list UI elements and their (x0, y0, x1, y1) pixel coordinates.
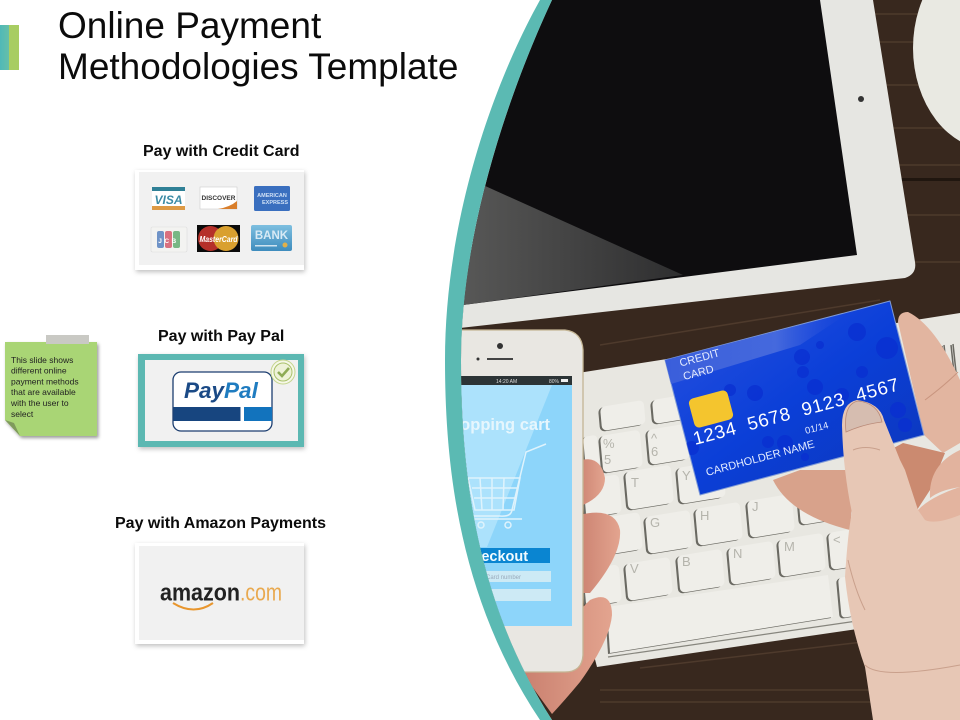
key legends: ^ (651, 431, 658, 446)
card number: 1234 5678 9123 4567 (691, 374, 901, 449)
wood table (440, 0, 960, 720)
note text: select (11, 409, 34, 419)
heading: paypal: Pay with Pay Pal (158, 328, 284, 345)
icon: american express (254, 186, 290, 211)
icon: bank (251, 225, 292, 251)
key legends: N (733, 546, 742, 561)
cardholder name: CARDHOLDER NAME (705, 438, 816, 479)
thumb nail (846, 401, 882, 432)
icon: jcb: JCB (158, 238, 179, 245)
icon: amazon logo: .com (240, 580, 282, 606)
right hand behind card (773, 312, 960, 530)
key legends: M (784, 539, 795, 554)
shopping cart icon (468, 444, 546, 528)
icon: mastercard (197, 225, 240, 252)
key legends: J (752, 499, 758, 514)
phone screen: 80% (549, 379, 560, 385)
icon: discover: DISCOVER (202, 195, 236, 202)
icon: discover (200, 187, 237, 209)
phone (461, 329, 584, 673)
note tape (46, 335, 89, 344)
finger lobes (930, 450, 960, 498)
icon: amazon logo (160, 580, 282, 610)
left hand fingers (520, 459, 620, 714)
key legends: G (650, 515, 660, 530)
title: Online Payment (58, 5, 321, 46)
card labels: CREDIT (678, 347, 721, 370)
phone screen (461, 376, 572, 626)
title accent bar (0, 25, 19, 70)
keyboard (578, 313, 960, 667)
note text: payment methods (11, 376, 79, 386)
note text: different online (11, 366, 67, 376)
note text: This slide shows (11, 355, 73, 365)
note text: with the user to (10, 398, 69, 408)
palm and thumb (842, 400, 960, 720)
sticky note (5, 335, 97, 436)
icon: jcb (151, 227, 187, 252)
note text: that are available (11, 387, 76, 397)
paypal frame (138, 354, 304, 447)
panel: pay with credit card (135, 143, 304, 270)
key legends: Y (682, 468, 691, 483)
phone screen: Card number (486, 575, 521, 581)
key legends (603, 431, 841, 576)
panel: pay with paypal (138, 328, 304, 447)
key legends: 6 (651, 444, 658, 459)
card chip (688, 389, 734, 429)
heading: amazon: Pay with Amazon Payments (115, 515, 326, 532)
heading: credit card: Pay with Credit Card (143, 143, 299, 160)
card expiry: 01/14 (804, 420, 830, 437)
icon: american express: EXPRESS (262, 200, 288, 206)
key legends: % (603, 436, 615, 451)
icon: mastercard: MasterCard (200, 234, 238, 244)
icon: paypal card (173, 372, 272, 431)
icon: american express: AMERICAN (257, 193, 287, 199)
card bubbles (685, 323, 912, 461)
card header band (665, 319, 825, 384)
keyboard keys (583, 344, 956, 653)
icon: paypal card: PayPal (184, 378, 259, 403)
key legends: 5 (604, 452, 611, 467)
panel: pay with amazon payments (115, 515, 326, 644)
credit card (665, 301, 924, 495)
card labels: CARD (682, 363, 715, 383)
icon: visa (152, 187, 185, 210)
icon: amazon logo: amazon (160, 580, 240, 606)
title: Methodologies Template (58, 46, 458, 87)
photo: hands with credit card and phone (439, 0, 960, 720)
note fold (5, 420, 20, 436)
phone screen: Shopping cart (439, 416, 550, 434)
icon: visa: VISA (154, 193, 183, 207)
cup (913, 0, 960, 150)
icon: check badge (271, 360, 295, 384)
amazon frame (135, 543, 304, 644)
key legends: T (631, 475, 639, 490)
credit card logo frame (135, 170, 304, 270)
icon: bank: BANK (255, 230, 289, 242)
key legends: V (630, 561, 639, 576)
phone screen: Checkout (462, 549, 528, 565)
card labels (680, 348, 718, 380)
key legends: H (700, 508, 709, 523)
tablet (440, 0, 915, 328)
key legends: B (682, 554, 691, 569)
teal curved band (445, 0, 552, 720)
key legends: < (833, 532, 841, 547)
phone screen: 14:20 AM (496, 379, 517, 385)
